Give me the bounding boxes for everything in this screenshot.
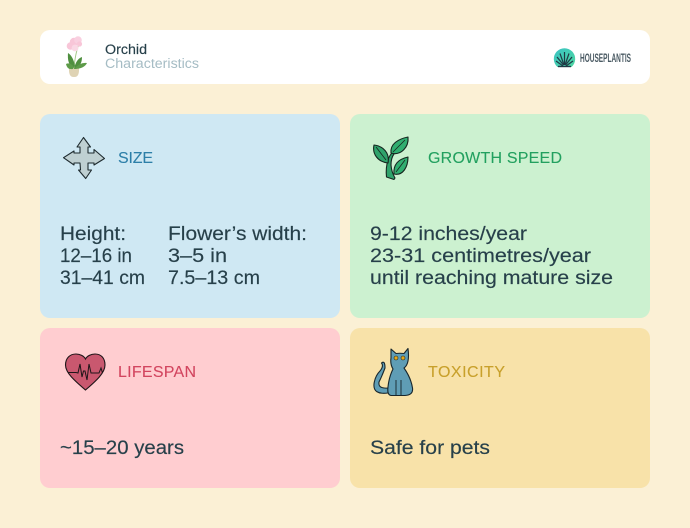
text: growth rates: 23-31 centimetres/year	[370, 246, 592, 267]
panel: toxicity	[350, 328, 650, 488]
logo: Houseplantis	[554, 48, 631, 67]
text: growth rates	[370, 224, 613, 289]
heading: size: SIZE	[118, 150, 153, 167]
icon: orchid plant	[66, 36, 87, 77]
text: height: Height:	[60, 224, 126, 245]
panel: size	[40, 114, 340, 318]
text: growth rates: 9-12 inches/year	[370, 224, 528, 245]
text: flower width	[168, 224, 307, 289]
icon: cat	[374, 348, 413, 396]
text: lifespan years: ~15–20 years	[60, 438, 184, 459]
header panel	[40, 30, 650, 84]
text: flower width: 3–5 in	[168, 246, 227, 267]
text: flower width: Flower’s width:	[168, 224, 307, 245]
panel: growth speed	[350, 114, 650, 318]
logo: Houseplantis: HOUSEPLANTIS	[580, 53, 631, 65]
text: flower width: 7.5–13 cm	[168, 268, 260, 289]
text: height	[60, 224, 145, 289]
text: growth rates: until reaching mature size	[370, 268, 613, 289]
text: height: 31–41 cm	[60, 268, 145, 289]
icon: heart with pulse	[66, 354, 105, 390]
heading: toxicity: TOXICITY	[428, 364, 505, 381]
text: pet safety: Safe for pets	[370, 438, 490, 459]
title: Characteristics	[105, 56, 199, 71]
title	[105, 42, 199, 71]
heading: growth speed: GROWTH SPEED	[428, 150, 562, 167]
heading: lifespan: LIFESPAN	[118, 364, 196, 381]
icon: four-way arrows	[64, 138, 104, 178]
text: height: 12–16 in	[60, 246, 132, 267]
title: Orchid	[105, 42, 147, 57]
panel: lifespan	[40, 328, 340, 488]
icon: leaves	[374, 137, 408, 180]
